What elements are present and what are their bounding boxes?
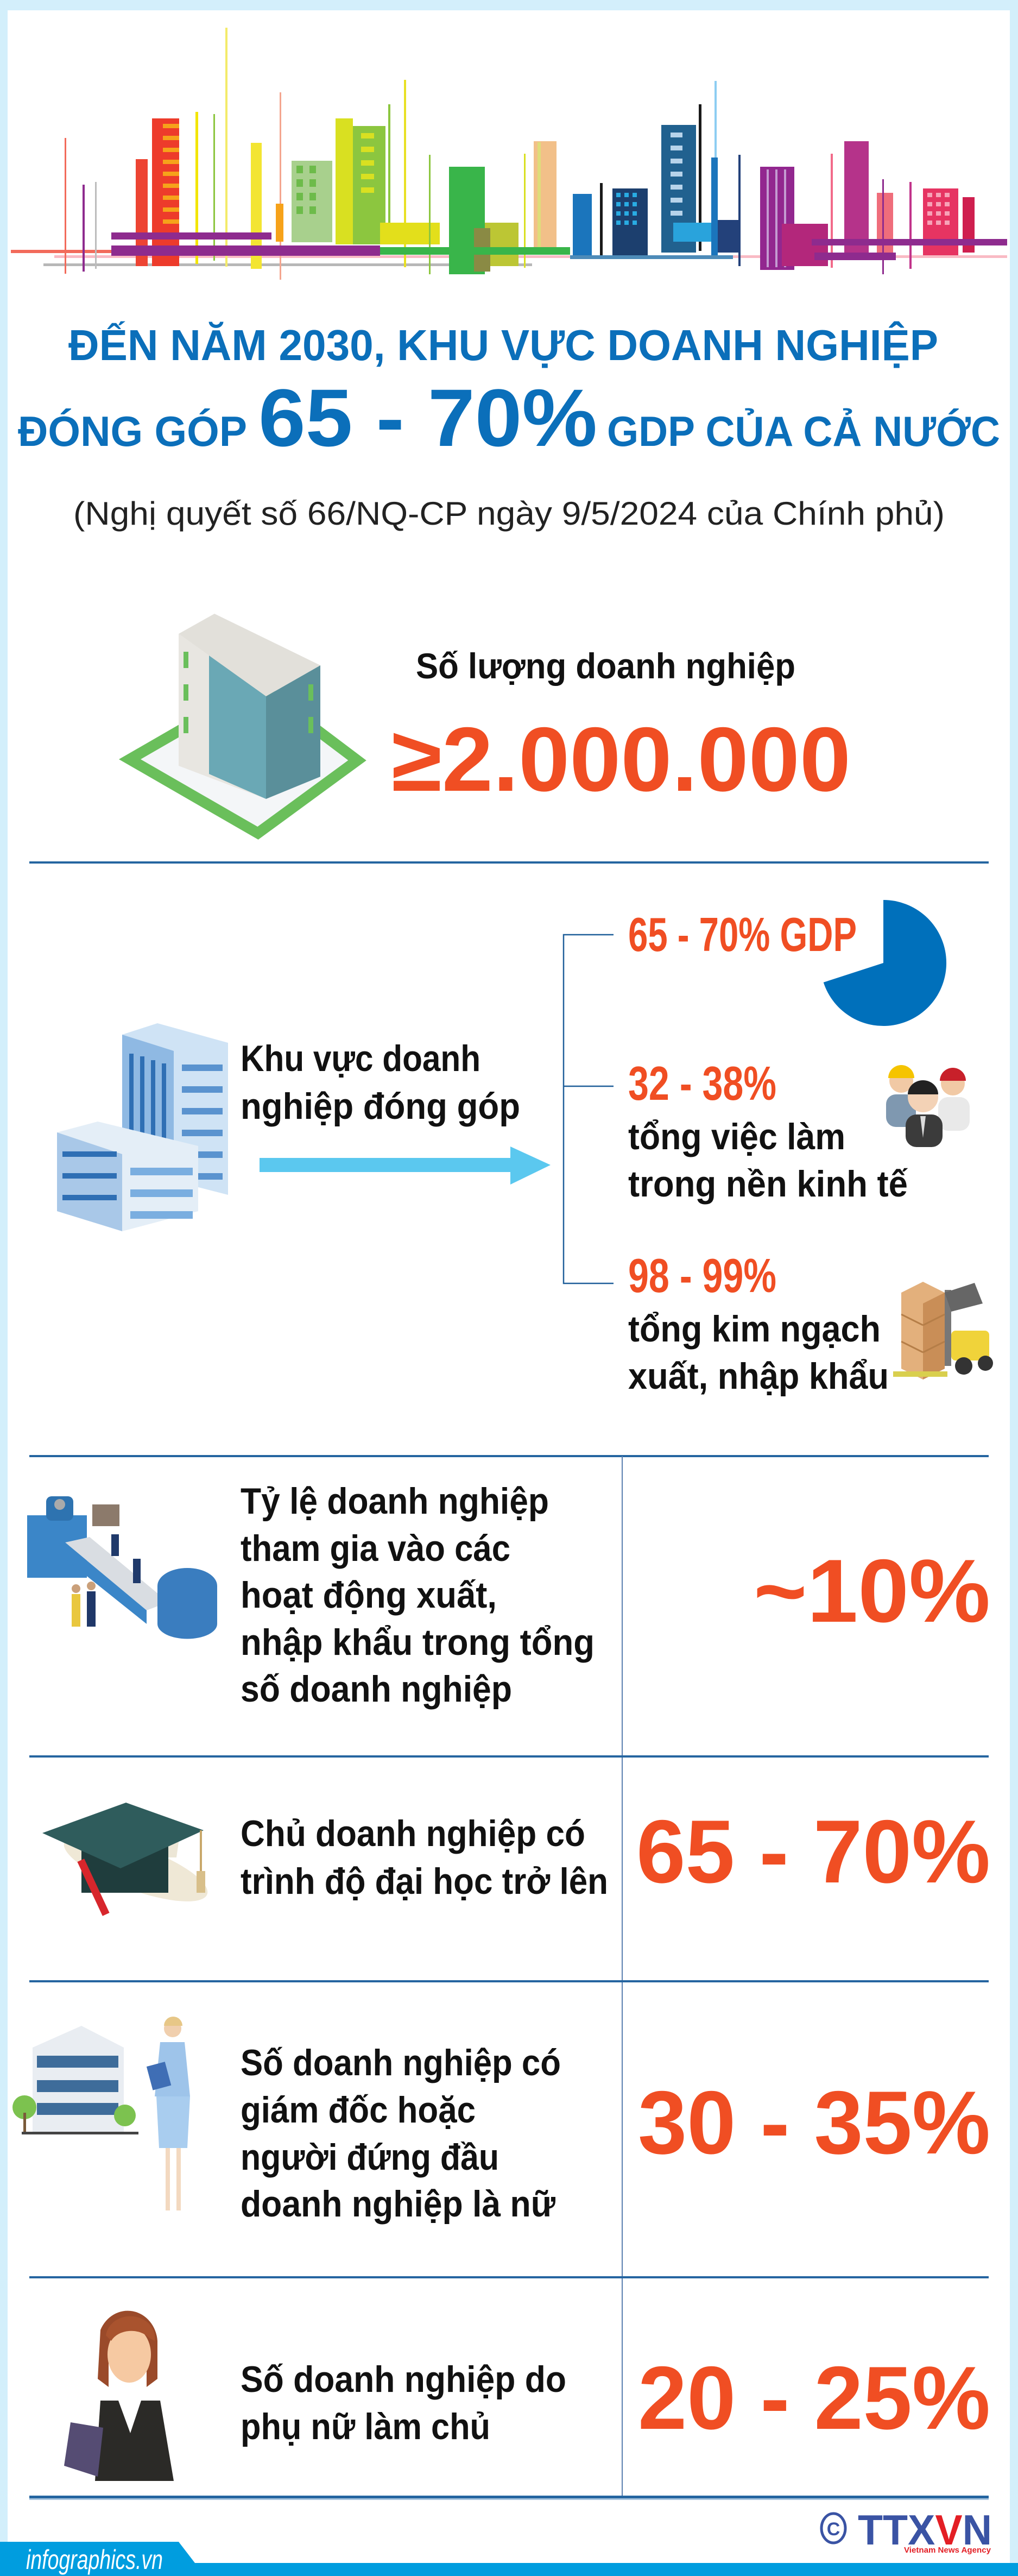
subtitle: (Nghị quyết số 66/NQ-CP ngày 9/5/2024 của Chính phủ) [73, 495, 945, 532]
row 2: university degree: Chủ doanh nghiệp có [241, 1813, 585, 1854]
logo: TTXVN: C [827, 2519, 840, 2540]
logo: TTXVN: TTXVN [858, 2506, 992, 2554]
row 4: female owners [64, 2311, 990, 2481]
footer bar: infographics.vn [26, 2544, 163, 2575]
icon: workers [886, 1065, 970, 1147]
row 1: export participation: hoạt động xuất, [241, 1574, 497, 1616]
row 3: female director: 30 - 35% [638, 2073, 990, 2172]
icon: isometric building [130, 614, 357, 833]
title: ĐẾN NĂM 2030, KHU VỰC DOANH NGHIỆP [68, 321, 938, 369]
text: business sector contributes: Khu vực doanh [241, 1038, 480, 1079]
row 4: female owners: phụ nữ làm chủ [241, 2406, 490, 2447]
row 3: female director: Số doanh nghiệp có [241, 2042, 561, 2083]
row 1: export participation: nhập khẩu trong tổng [241, 1622, 595, 1663]
icon: businesswoman [64, 2311, 174, 2481]
text: business sector contributes: nghiệp đóng góp [241, 1086, 520, 1127]
skyline illustration [11, 28, 1007, 280]
row 3: female director: người đứng đầu [241, 2137, 499, 2178]
stat: employment: 32 - 38% [628, 1056, 776, 1110]
title: GDP CỦA CẢ NƯỚC [607, 407, 1000, 455]
arrow [260, 1147, 551, 1185]
icon: office building blue [57, 1023, 228, 1231]
row 1: export participation: số doanh nghiệp [241, 1668, 512, 1710]
bracket connector [564, 935, 614, 1283]
pie chart [824, 900, 946, 1026]
stat: number of enterprises [391, 646, 851, 810]
icon: factory conveyor [27, 1496, 217, 1639]
stat: GDP share: 65 - 70% GDP [628, 908, 857, 961]
row 2: university degree: 65 - 70% [636, 1802, 990, 1901]
row 1: export participation: Tỷ lệ doanh nghiệp [241, 1481, 549, 1522]
stat: employment: tổng việc làm [628, 1116, 845, 1157]
text: business sector contributes [241, 1038, 520, 1127]
row 1: export participation: tham gia vào các [241, 1528, 510, 1569]
title [18, 321, 1000, 463]
stat: import export: 98 - 99% [628, 1249, 776, 1302]
row 2: university degree [42, 1802, 990, 1916]
icon: forklift [893, 1282, 993, 1380]
stat: number of enterprises: Số lượng doanh nghiệp [416, 646, 795, 686]
stat: import export [628, 1249, 889, 1397]
stat: number of enterprises: ≥2.000.000 [391, 708, 851, 810]
row 1: export participation: ~10% [754, 1541, 990, 1641]
row 1: export participation [27, 1481, 990, 1710]
icon: building and businesswoman [12, 2017, 190, 2210]
row 3: female director: giám đốc hoặc [241, 2089, 476, 2131]
stat: import export: tổng kim ngạch [628, 1308, 881, 1350]
stat: employment: trong nền kinh tế [628, 1163, 908, 1205]
stat: import export: xuất, nhập khẩu [628, 1356, 889, 1397]
row 4: female owners: 20 - 25% [638, 2348, 990, 2448]
icon: graduation cap [42, 1803, 214, 1916]
title: 65 - 70% [258, 372, 597, 463]
logo: TTXVN: Vietnam News Agency [904, 2546, 991, 2555]
row 3: female director: doanh nghiệp là nữ [241, 2183, 556, 2225]
title: ĐÓNG GÓP [18, 407, 247, 455]
stat: employment [628, 1056, 908, 1205]
row 4: female owners: Số doanh nghiệp do [241, 2359, 566, 2400]
row 2: university degree: trình độ đại học trở lên [241, 1861, 608, 1902]
row 3: female director [12, 2017, 990, 2225]
footer bar [0, 2542, 1018, 2576]
